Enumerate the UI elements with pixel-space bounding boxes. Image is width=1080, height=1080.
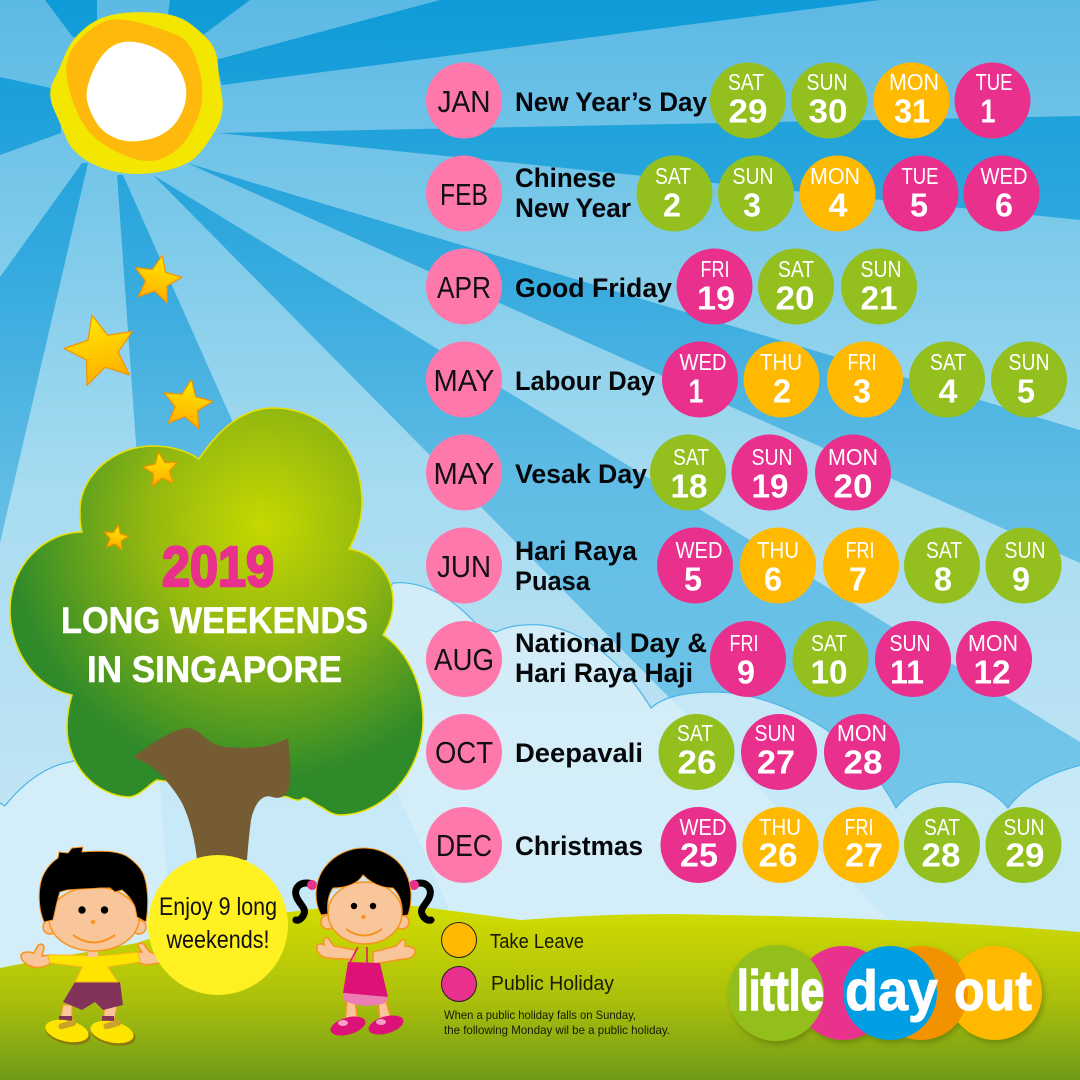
day: FRI 3 bbox=[827, 342, 903, 418]
month: JAN bbox=[426, 62, 502, 138]
day: THU 2: 2 bbox=[773, 372, 791, 410]
day: SUN 3: 3 bbox=[743, 186, 761, 224]
row: August bbox=[426, 621, 1032, 697]
day: TUE 5: TUE bbox=[902, 163, 938, 189]
row: January bbox=[426, 62, 1030, 138]
day: SAT 18 bbox=[650, 434, 726, 510]
girl eyes bbox=[351, 903, 376, 909]
day: WED 5 bbox=[657, 528, 733, 604]
day: FRI 7: FRI bbox=[846, 537, 874, 563]
day: WED 1: WED bbox=[680, 349, 726, 375]
day: SUN 5: SUN bbox=[1008, 349, 1050, 375]
girl ears bbox=[321, 915, 409, 929]
sun bbox=[51, 13, 222, 173]
day: MON 28: MON bbox=[837, 720, 887, 746]
month: JUN: JUN bbox=[437, 549, 491, 584]
boy smile bbox=[73, 935, 115, 942]
day: MON 4: 4 bbox=[828, 186, 848, 224]
day: SAT 8 bbox=[904, 528, 980, 604]
day: THU 6: 6 bbox=[764, 560, 782, 598]
holiday: Chinese New Year: Chinese bbox=[515, 163, 616, 193]
day: SAT 26 bbox=[658, 714, 734, 790]
day: SUN 21: SUN bbox=[860, 256, 902, 282]
day: SAT 8: SAT bbox=[926, 537, 962, 563]
day: SAT 4: 4 bbox=[938, 372, 958, 410]
holiday: National Day and Hari Raya Haji bbox=[515, 628, 707, 688]
day: SUN 29 bbox=[986, 807, 1062, 883]
logo text: out: out bbox=[954, 959, 1032, 1023]
boy hair bbox=[39, 847, 148, 922]
day: MON 28 bbox=[824, 714, 900, 790]
speech bubble bbox=[148, 855, 288, 995]
holiday: Chinese New Year bbox=[515, 163, 631, 223]
day: TUE 5 bbox=[882, 156, 958, 232]
day: SAT 8: 8 bbox=[934, 560, 952, 598]
day: SUN 30 bbox=[791, 62, 867, 138]
day: MON 31: 31 bbox=[894, 92, 930, 130]
day: MON 12: MON bbox=[968, 630, 1018, 656]
girl nose bbox=[361, 915, 366, 919]
day: SUN 19: SUN bbox=[752, 444, 792, 470]
day: SUN 11: 11 bbox=[890, 654, 924, 690]
month: MAY bbox=[426, 342, 502, 418]
day: SAT 20 bbox=[758, 248, 834, 324]
title line 2: IN SINGAPORE bbox=[87, 649, 342, 690]
day: SAT 20: SAT bbox=[778, 256, 814, 282]
day: SUN 27: 27 bbox=[757, 744, 795, 780]
day: WED 6: WED bbox=[980, 163, 1028, 189]
day: SAT 10: 10 bbox=[810, 654, 848, 690]
logo text: day: day bbox=[845, 959, 938, 1023]
girl legs bbox=[345, 1000, 392, 1024]
day: MON 20: 20 bbox=[834, 468, 872, 504]
boy ears bbox=[43, 920, 146, 934]
day: SUN 3: SUN bbox=[732, 163, 774, 189]
day: SAT 18: 18 bbox=[670, 468, 708, 504]
day: WED 5: 5 bbox=[684, 560, 702, 598]
day: FRI 9: 9 bbox=[737, 654, 755, 690]
day: MON 12 bbox=[956, 621, 1032, 697]
day: FRI 19: FRI bbox=[700, 256, 730, 282]
day: SAT 29: 29 bbox=[728, 92, 768, 130]
day: THU 26 bbox=[742, 807, 818, 883]
month: DEC: DEC bbox=[436, 828, 492, 863]
legend bbox=[442, 922, 670, 1037]
day: MON 12: 12 bbox=[974, 654, 1010, 690]
clouds bbox=[0, 583, 1080, 1080]
boy shorts bbox=[63, 982, 123, 1010]
logo circles bbox=[728, 945, 1042, 1041]
day: SAT 2: 2 bbox=[663, 186, 681, 224]
day: WED 25 bbox=[660, 807, 736, 883]
day: SUN 30: 30 bbox=[808, 92, 848, 130]
day: SAT 2 bbox=[636, 156, 712, 232]
day: FRI 27: 27 bbox=[845, 836, 883, 874]
day: MON 4: MON bbox=[810, 163, 860, 189]
day: SUN 29: SUN bbox=[1004, 814, 1044, 840]
girl character bbox=[296, 848, 431, 1039]
month: APR bbox=[426, 248, 502, 324]
legend: take leave swatch bbox=[442, 922, 476, 958]
girl face bbox=[328, 882, 402, 944]
girl pigtails bbox=[296, 883, 431, 920]
day: SUN 19 bbox=[732, 434, 808, 510]
day: SAT 4 bbox=[909, 342, 985, 418]
boy shoes bbox=[43, 1016, 138, 1050]
hills bbox=[0, 905, 1080, 1080]
day: SUN 27 bbox=[741, 714, 817, 790]
legend: take leave label: Take Leave bbox=[490, 931, 584, 953]
month: OCT bbox=[426, 714, 502, 790]
day: TUE 1: 1 bbox=[980, 92, 996, 130]
day: FRI 27: FRI bbox=[844, 814, 874, 840]
day: FRI 19: 19 bbox=[697, 280, 735, 316]
tree crown bbox=[10, 408, 423, 815]
day: SAT 29 bbox=[710, 62, 786, 138]
boy nose bbox=[91, 920, 95, 924]
holiday: National Day and Hari Raya Haji: National Day & bbox=[515, 628, 707, 658]
boy eyes bbox=[78, 906, 108, 914]
day: FRI 9: FRI bbox=[730, 630, 758, 656]
day: SAT 18: SAT bbox=[673, 444, 709, 470]
day: WED 1: 1 bbox=[688, 372, 704, 410]
row: May, Labour Day bbox=[426, 342, 1067, 418]
stars bbox=[58, 251, 216, 430]
day: FRI 7: 7 bbox=[849, 560, 867, 598]
boy neck bbox=[88, 949, 98, 957]
day: FRI 3: 3 bbox=[853, 372, 871, 410]
day: SAT 4: SAT bbox=[930, 349, 966, 375]
legend: public holiday swatch bbox=[442, 966, 476, 1002]
day: SUN 9 bbox=[986, 528, 1062, 604]
row: December bbox=[426, 807, 1062, 883]
day: MON 31 bbox=[874, 62, 950, 138]
day: SUN 9: SUN bbox=[1004, 537, 1046, 563]
month: FEB bbox=[426, 156, 502, 232]
day: SUN 19: 19 bbox=[752, 468, 788, 504]
legend: note: When a public holiday falls on Sunday, bbox=[444, 1008, 636, 1022]
girl arms and hands bbox=[317, 938, 415, 964]
logo: little day out bbox=[728, 945, 1042, 1041]
legend: note bbox=[444, 1008, 670, 1037]
day: WED 1 bbox=[662, 342, 738, 418]
day: FRI 19 bbox=[676, 248, 752, 324]
day: SUN 30: SUN bbox=[806, 69, 848, 95]
day: SAT 26: SAT bbox=[677, 720, 713, 746]
day: SAT 28: SAT bbox=[924, 814, 960, 840]
day: WED 25: WED bbox=[680, 814, 726, 840]
boy legs bbox=[60, 1005, 117, 1022]
holiday: Hari Raya Puasa: Hari Raya bbox=[515, 536, 638, 566]
day: SUN 29: 29 bbox=[1006, 836, 1044, 874]
holiday: Hari Raya Puasa bbox=[515, 536, 638, 596]
holiday: Hari Raya Puasa: Puasa bbox=[515, 566, 591, 596]
day: WED 6: 6 bbox=[995, 186, 1013, 224]
day: FRI 27 bbox=[823, 807, 899, 883]
day: SAT 2: SAT bbox=[655, 163, 691, 189]
boy face bbox=[49, 887, 139, 951]
month: JUN bbox=[426, 528, 502, 604]
boy shirt bbox=[48, 952, 140, 982]
title year: 2019 bbox=[162, 535, 274, 599]
day: THU 6: THU bbox=[757, 537, 799, 563]
holiday: Vesak Day: Vesak Day bbox=[515, 459, 647, 489]
day: SUN 9: 9 bbox=[1012, 560, 1030, 598]
girl hair bbox=[316, 848, 411, 916]
day: MON 20 bbox=[815, 434, 891, 510]
day: MON 28: 28 bbox=[844, 744, 882, 780]
tree bbox=[10, 408, 423, 860]
bubble text line 2: weekends! bbox=[166, 926, 270, 954]
month: AUG bbox=[426, 621, 502, 697]
holiday: National Day and Hari Raya Haji: Hari Raya Haji bbox=[515, 658, 693, 688]
day: SAT 26: 26 bbox=[678, 744, 716, 780]
day: FRI 3: FRI bbox=[848, 349, 876, 375]
day: SUN 5: 5 bbox=[1017, 372, 1035, 410]
girl smile bbox=[346, 929, 382, 936]
day: WED 25: 25 bbox=[680, 836, 718, 874]
day: SUN 21 bbox=[841, 248, 917, 324]
row: April bbox=[426, 248, 917, 324]
row: February bbox=[426, 156, 1040, 232]
day: WED 6 bbox=[964, 156, 1040, 232]
day: THU 6 bbox=[740, 528, 816, 604]
boy character bbox=[21, 847, 160, 1050]
girl hair ties bbox=[307, 880, 419, 890]
day: MON 4 bbox=[800, 156, 876, 232]
holiday: Good Friday: Good Friday bbox=[515, 273, 672, 303]
day: SUN 5 bbox=[991, 342, 1067, 418]
logo text: little: little bbox=[737, 959, 824, 1023]
day: FRI 7 bbox=[823, 528, 899, 604]
month: DEC bbox=[426, 807, 502, 883]
bubble text: Enjoy 9 long bbox=[159, 893, 277, 921]
day: TUE 1 bbox=[954, 62, 1030, 138]
day: SUN 27: SUN bbox=[754, 720, 796, 746]
day: SAT 10 bbox=[792, 621, 868, 697]
day: SUN 11 bbox=[875, 621, 951, 697]
holiday: Christmas: Christmas bbox=[515, 831, 643, 861]
girl shoes bbox=[328, 1012, 406, 1039]
month: APR: APR bbox=[437, 270, 491, 305]
day: THU 26: 26 bbox=[758, 836, 798, 874]
girl dress bbox=[343, 947, 388, 1006]
month: FEB: FEB bbox=[440, 177, 488, 212]
day: SAT 28: 28 bbox=[922, 836, 960, 874]
day: THU 2: THU bbox=[760, 349, 802, 375]
month: MAY bbox=[426, 434, 502, 510]
tree trunk bbox=[133, 728, 290, 860]
day: SUN 11: SUN bbox=[890, 630, 930, 656]
holiday: Chinese New Year: New Year bbox=[515, 193, 631, 223]
month: JAN: JAN bbox=[438, 84, 490, 119]
day: SUN 21: 21 bbox=[860, 280, 898, 316]
row: June bbox=[426, 528, 1062, 604]
day: SAT 20: 20 bbox=[776, 280, 814, 316]
title bbox=[61, 535, 368, 690]
month: MAY: MAY bbox=[434, 363, 494, 398]
month: MAY: MAY bbox=[434, 456, 494, 491]
row: October bbox=[426, 714, 900, 790]
month: OCT: OCT bbox=[435, 735, 493, 770]
legend: note: the following Monday wil be a public holiday. bbox=[444, 1023, 670, 1037]
day: SUN 3 bbox=[718, 156, 794, 232]
legend: public holiday label: Public Holiday bbox=[491, 973, 614, 995]
row: May, Vesak Day bbox=[426, 434, 891, 510]
day: MON 20: MON bbox=[828, 444, 878, 470]
holiday: Labour Day: Labour Day bbox=[515, 366, 655, 396]
day: SAT 29: SAT bbox=[728, 69, 764, 95]
day: THU 26: THU bbox=[759, 814, 801, 840]
small stars on crown bbox=[102, 450, 180, 551]
day: MON 31: MON bbox=[889, 69, 939, 95]
boy hands bbox=[21, 943, 160, 967]
day: TUE 5: 5 bbox=[910, 186, 928, 224]
month: AUG: AUG bbox=[434, 642, 494, 677]
day: FRI 9 bbox=[710, 621, 786, 697]
holiday: New Year's Day: New Year’s Day bbox=[515, 87, 707, 117]
day: SAT 28 bbox=[904, 807, 980, 883]
title line 1: LONG WEEKENDS bbox=[61, 600, 368, 641]
holiday: Deepavali: Deepavali bbox=[515, 738, 643, 768]
day: THU 2 bbox=[744, 342, 820, 418]
day: WED 5: WED bbox=[676, 537, 722, 563]
day: SAT 10: SAT bbox=[811, 630, 847, 656]
day: TUE 1: TUE bbox=[976, 69, 1012, 95]
